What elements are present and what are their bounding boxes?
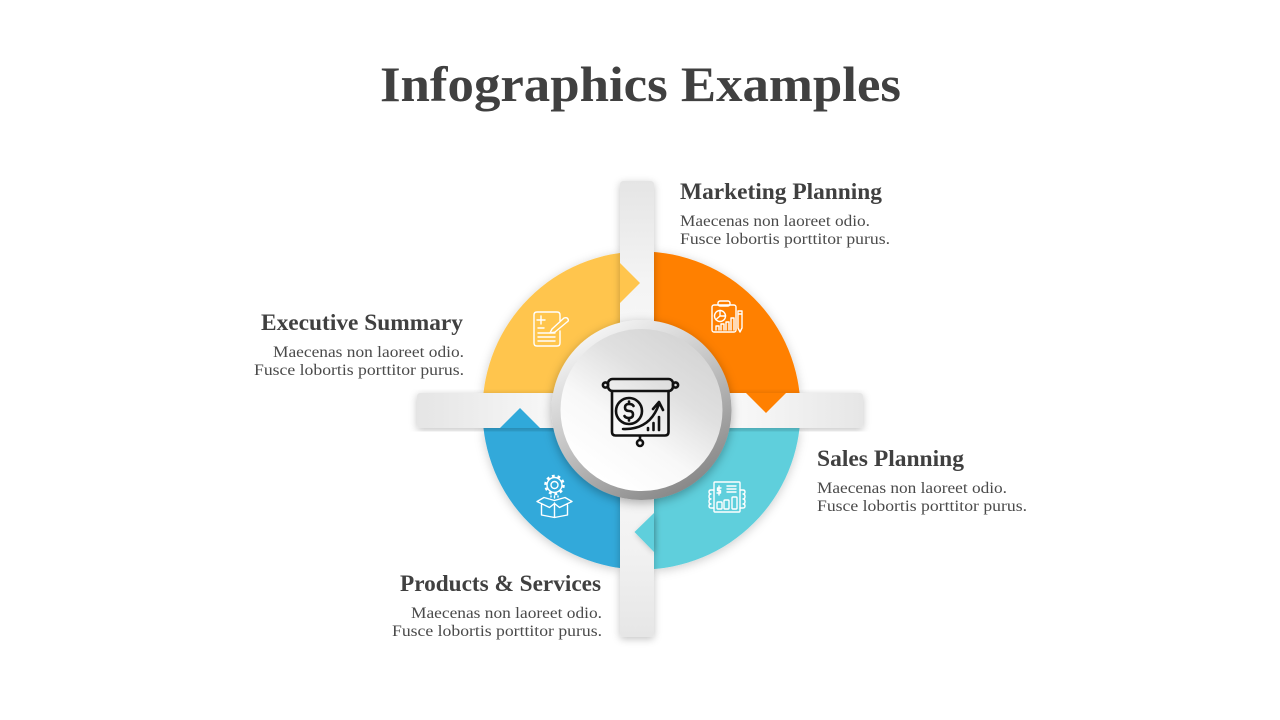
icon: report and coins: [709, 482, 745, 512]
text block: products and services: Fusce lobortis porttitor purus.: [392, 623, 602, 640]
arrow: blue: [500, 408, 540, 428]
text block: marketing planning: Maecenas non laoreet odio.: [680, 213, 870, 230]
text block: marketing planning: Fusce lobortis porttitor purus.: [680, 231, 890, 248]
icon: box and gear: [537, 476, 572, 518]
text block: sales planning: Maecenas non laoreet odio.: [817, 480, 1007, 497]
arrow: cyan: [634, 513, 654, 552]
text block: executive summary: Fusce lobortis porttitor purus.: [254, 362, 464, 379]
panel: ring segments: [482, 252, 800, 570]
segment: executive summary: [480, 252, 620, 393]
text block: sales planning: [817, 446, 1027, 515]
title: Infographics Examples: [380, 56, 901, 112]
icon: document and pencil: [534, 312, 568, 346]
text block: executive summary: Maecenas non laoreet odio.: [273, 344, 464, 361]
center disk: [552, 320, 732, 500]
horizontal bar: [417, 393, 863, 428]
segment: sales planning: [654, 428, 803, 574]
segment: products and services: [480, 428, 620, 574]
text block: products and services: [392, 571, 602, 640]
text block: marketing planning: Marketing Planning: [680, 179, 883, 204]
vertical bar: [620, 181, 654, 637]
icon: presentation board: [603, 379, 678, 446]
text block: products and services: Products & Services: [400, 571, 601, 596]
segment: marketing planning: [654, 250, 803, 393]
text block: sales planning: Fusce lobortis porttitor purus.: [817, 498, 1027, 515]
icon: clipboard chart: [712, 301, 742, 332]
text block: executive summary: [254, 310, 464, 379]
text block: products and services: Maecenas non laoreet odio.: [411, 605, 602, 622]
arrow: yellow: [620, 263, 640, 303]
text block: executive summary: Executive Summary: [261, 310, 464, 335]
text block: sales planning: Sales Planning: [817, 446, 965, 471]
text block: marketing planning: [680, 179, 890, 248]
arrow: orange: [746, 393, 786, 413]
